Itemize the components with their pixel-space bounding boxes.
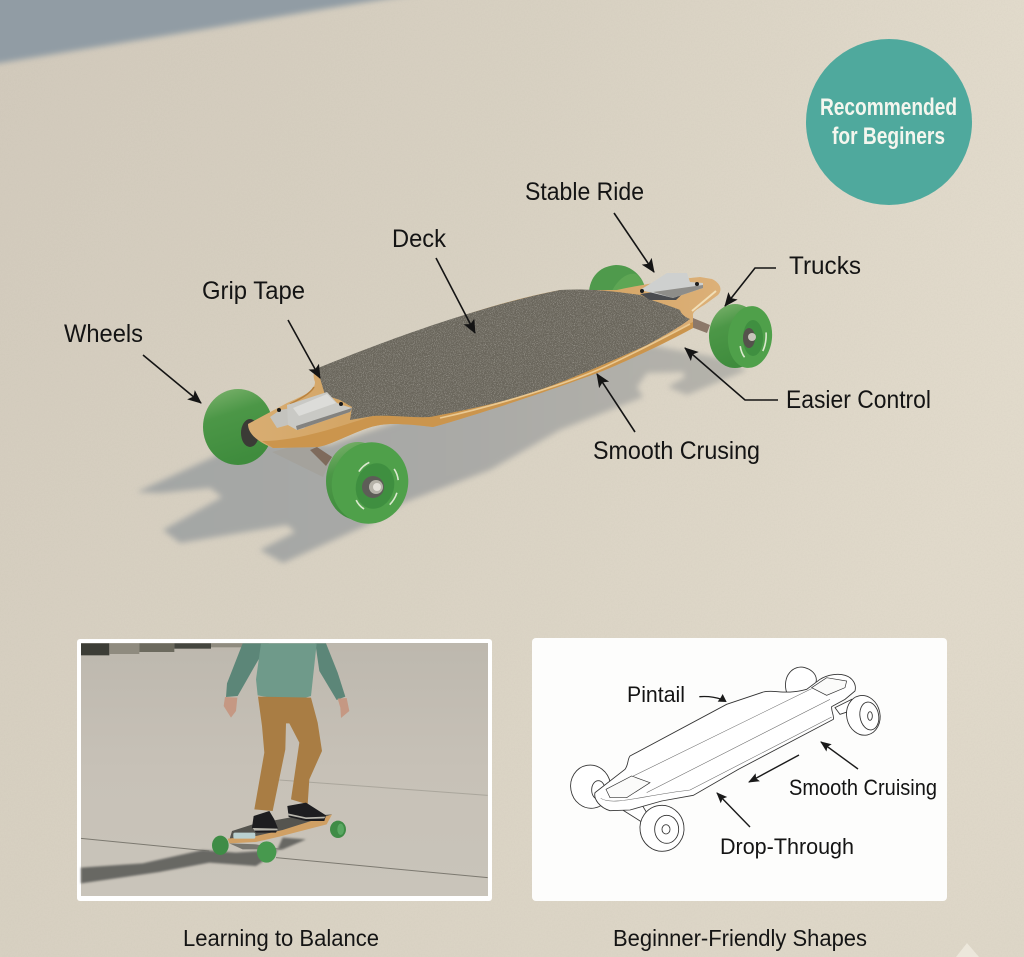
panel: beginner-friendly shapes drawing (532, 638, 947, 901)
label: Wheels: Wheels (64, 320, 143, 348)
truck sketch, front (812, 678, 847, 695)
arrow: pintail (699, 694, 727, 702)
panel: learning to balance photo (77, 639, 492, 901)
rear axle (272, 447, 332, 477)
caption: Learning to Balance: Learning to Balance (183, 925, 379, 951)
label: Pintail: Pintail (627, 682, 685, 707)
deck side band (262, 322, 693, 448)
bottom axle (622, 804, 647, 822)
deck inner lines (601, 689, 832, 801)
badge: Recommended for Beginers: for Beginers (832, 123, 945, 150)
rear truck plate (270, 392, 352, 430)
distant wall (81, 643, 243, 655)
pavement joint lines (81, 780, 488, 878)
badge: Recommended for Beginers: Recommended (820, 94, 957, 121)
label: Trucks: Trucks (789, 252, 861, 280)
bottom wheel sketch (637, 802, 687, 854)
label: Easier Control: Easier Control (786, 386, 931, 414)
label: Smooth Crusing: Smooth Crusing (593, 437, 760, 465)
label: Smooth Cruising: Smooth Cruising (789, 775, 937, 800)
small longboard (212, 814, 346, 863)
label: Stable Ride: Stable Ride (525, 178, 644, 206)
caption: Beginner-Friendly Shapes: Beginner-Friendly Shapes (613, 925, 867, 951)
front truck plate (640, 273, 703, 300)
front-bottom wheel (321, 432, 419, 534)
grip tape (318, 289, 690, 420)
deck outline sketch (595, 674, 855, 811)
right wheel (709, 304, 775, 370)
rider trousers (254, 697, 322, 811)
truck sketch, rear (606, 776, 650, 798)
deck highlight stripes (290, 291, 716, 418)
left wheel sketch (567, 762, 614, 811)
badge: Recommended for Beginers (806, 39, 972, 205)
drawing arrows (717, 742, 858, 827)
front axle (691, 318, 710, 333)
far wheel sketch (785, 667, 816, 693)
rider shoes (252, 803, 326, 833)
longboard illustration (137, 213, 778, 563)
label arrows (143, 213, 778, 432)
label: Drop-Through: Drop-Through (720, 834, 854, 859)
corner mark (956, 943, 979, 957)
right wheel sketch (835, 692, 884, 738)
cast shadow (137, 345, 747, 563)
rider arms (224, 643, 349, 718)
label: Grip Tape: Grip Tape (202, 277, 305, 305)
rider shadow (81, 838, 306, 883)
left wheel (203, 389, 273, 465)
rider sweater (256, 643, 317, 702)
far wheel (589, 265, 646, 292)
label: Deck: Deck (392, 225, 446, 253)
deck wood (248, 277, 720, 448)
